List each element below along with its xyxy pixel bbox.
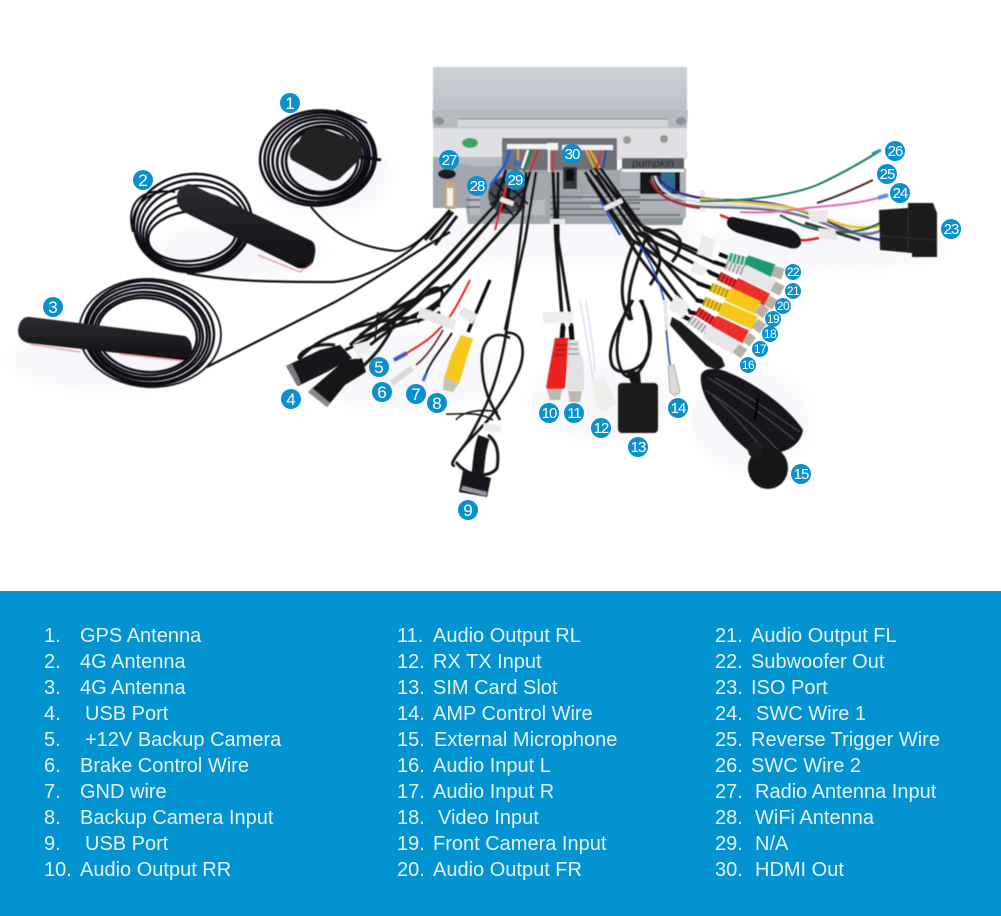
legend column 2: Front Camera Input bbox=[433, 833, 606, 855]
icon: RX TX input plug bbox=[580, 300, 617, 412]
legend column 1: 5. bbox=[44, 729, 61, 751]
legend column 1 bbox=[44, 625, 282, 881]
legend column 1: 6. bbox=[44, 755, 61, 777]
icon: 3.5mm microphone plug bbox=[670, 317, 725, 370]
badge 13: 13 bbox=[631, 439, 646, 456]
legend column 3: Radio Antenna Input bbox=[755, 781, 936, 803]
badge 17 bbox=[752, 341, 768, 357]
legend column 2: 20. bbox=[397, 859, 425, 881]
badge 24: 24 bbox=[893, 185, 908, 202]
legend column 2: Video Input bbox=[438, 807, 539, 829]
icon: black inline module bbox=[727, 217, 801, 248]
badge 2: 2 bbox=[138, 171, 148, 190]
badge 21: 21 bbox=[787, 284, 800, 298]
RCA 20 red bbox=[709, 272, 775, 305]
legend column 1: 3. bbox=[44, 677, 61, 699]
legend column 1: 1. bbox=[44, 625, 61, 647]
USB port 9 bbox=[446, 172, 526, 497]
legend column 3: 23. bbox=[715, 677, 743, 699]
badge 13 bbox=[628, 437, 648, 457]
badge 29: 29 bbox=[508, 172, 523, 189]
badge 23 bbox=[941, 219, 961, 239]
legend column 2: 15. bbox=[397, 729, 425, 751]
legend column 3: 22. bbox=[715, 651, 743, 673]
legend column 1: 9. bbox=[44, 833, 61, 855]
badge 15: 15 bbox=[794, 466, 809, 483]
legend column 2: 19. bbox=[397, 833, 425, 855]
icon: 4G antenna bottom bbox=[18, 232, 450, 391]
legend column 1: GPS Antenna bbox=[80, 625, 201, 647]
legend column 3: SWC Wire 2 bbox=[751, 755, 861, 777]
badge 26 bbox=[885, 141, 905, 161]
legend column 3: Audio Output FL bbox=[751, 625, 897, 647]
legend column 2: 13. bbox=[397, 677, 425, 699]
badge 21 bbox=[785, 283, 801, 299]
label: brand plate bbox=[622, 158, 684, 170]
badge 1: 1 bbox=[285, 94, 295, 113]
icon: external microphone bbox=[701, 369, 803, 489]
legend column 3: HDMI Out bbox=[755, 859, 844, 881]
backup and power wires 5 to 8 bbox=[392, 280, 490, 383]
legend column 1: 10. bbox=[44, 859, 72, 881]
legend column 2: Audio Input L bbox=[433, 755, 551, 777]
badge 11: 11 bbox=[567, 405, 581, 422]
legend column 2: External Microphone bbox=[434, 729, 617, 751]
legend column 2: Audio Output RL bbox=[433, 625, 581, 647]
label: brand plate: pumpkin bbox=[631, 158, 674, 170]
legend column 3: 27. bbox=[715, 781, 743, 803]
legend column 2: 11. bbox=[397, 625, 423, 647]
legend column 2: RX TX Input bbox=[433, 651, 542, 673]
badge 27 bbox=[439, 150, 459, 170]
badge 10 bbox=[539, 403, 559, 423]
badge 25 bbox=[877, 164, 897, 184]
RCA 19 yellow bbox=[697, 283, 766, 314]
badge 6: 6 bbox=[377, 383, 387, 402]
badge 11 bbox=[564, 403, 584, 423]
icon: 4G antenna top bbox=[129, 168, 450, 282]
badge 19: 19 bbox=[767, 312, 780, 326]
badge 16: 16 bbox=[742, 358, 755, 372]
legend column 2: 14. bbox=[397, 703, 425, 725]
badge 2 bbox=[133, 170, 153, 190]
legend column 1: Audio Output RR bbox=[80, 859, 231, 881]
legend column 3: N/A bbox=[755, 833, 788, 855]
badge 29 bbox=[505, 170, 525, 190]
legend column 3: Reverse Trigger Wire bbox=[751, 729, 940, 751]
legend column 2 bbox=[397, 625, 617, 881]
legend column 1: 4G Antenna bbox=[80, 677, 186, 699]
main cable bundles bbox=[350, 165, 715, 345]
badge 25: 25 bbox=[880, 166, 895, 183]
badge 3 bbox=[43, 297, 63, 317]
badge 8 bbox=[427, 393, 447, 413]
badge 24 bbox=[890, 183, 910, 203]
badge 15 bbox=[791, 464, 811, 484]
badge 17: 17 bbox=[754, 342, 767, 356]
RCA 18 yellow bbox=[696, 300, 763, 329]
legend column 3: 25. bbox=[715, 729, 743, 751]
badge 30 bbox=[562, 144, 582, 164]
badge 12: 12 bbox=[594, 420, 609, 437]
USB port group 4 bbox=[286, 285, 450, 407]
RCA 22 green bbox=[719, 254, 783, 274]
ties bbox=[499, 190, 705, 224]
icon: head unit rear bbox=[432, 67, 690, 225]
legend column 2: 18. bbox=[397, 807, 425, 829]
badge 9 bbox=[458, 500, 478, 520]
badge 12 bbox=[591, 418, 611, 438]
legend column 1: GND wire bbox=[80, 781, 167, 803]
RCA 16 white bbox=[682, 316, 744, 354]
RCA 10 red bbox=[546, 326, 569, 400]
badge 28: 28 bbox=[470, 178, 485, 195]
badge 30: 30 bbox=[565, 146, 580, 163]
legend column 1: Backup Camera Input bbox=[80, 807, 273, 829]
RCA 8 yellow bbox=[443, 335, 473, 392]
legend column 2: SIM Card Slot bbox=[433, 677, 557, 699]
icon: ISO connector bbox=[879, 203, 937, 257]
legend column 2: AMP Control Wire bbox=[433, 703, 593, 725]
badge 4 bbox=[281, 389, 301, 409]
badge 4: 4 bbox=[286, 390, 296, 409]
legend column 1: Brake Control Wire bbox=[80, 755, 249, 777]
badge 7 bbox=[406, 384, 426, 404]
legend column 2: 17. bbox=[397, 781, 425, 803]
badge 7: 7 bbox=[411, 385, 421, 404]
legend column 2: Audio Input R bbox=[433, 781, 554, 803]
badge 20: 20 bbox=[777, 299, 790, 313]
RCA connectors 16 to 22 bbox=[668, 235, 783, 354]
legend column 1: 7. bbox=[44, 781, 61, 803]
badge 23: 23 bbox=[944, 221, 959, 238]
badge 14: 14 bbox=[671, 400, 686, 417]
legend column 3: ISO Port bbox=[751, 677, 828, 699]
wiring photo illustration bbox=[17, 66, 961, 520]
icon: SIM card slot bbox=[610, 300, 658, 433]
legend column 1: 4. bbox=[44, 703, 61, 725]
badge 16 bbox=[740, 357, 756, 373]
badge 22 bbox=[785, 264, 801, 280]
GPS puck bbox=[290, 127, 362, 181]
legend column 3: WiFi Antenna bbox=[755, 807, 874, 829]
badge 18 bbox=[762, 326, 778, 342]
badge 14 bbox=[668, 398, 688, 418]
legend column 3: SWC Wire 1 bbox=[756, 703, 866, 725]
panel: legend bbox=[0, 591, 1001, 916]
badge 27: 27 bbox=[442, 152, 457, 169]
legend column 3: 28. bbox=[715, 807, 743, 829]
badge 3: 3 bbox=[48, 298, 58, 317]
badge 5: 5 bbox=[374, 358, 384, 377]
connector wires at head unit bbox=[490, 149, 620, 235]
antenna bar bbox=[177, 184, 315, 268]
legend column 1: 4G Antenna bbox=[80, 651, 186, 673]
antenna bar bbox=[18, 317, 192, 360]
badge 9: 9 bbox=[463, 501, 473, 520]
wire harness to ISO connector bbox=[650, 150, 888, 240]
badge 6 bbox=[372, 382, 392, 402]
legend column 1: 8. bbox=[44, 807, 61, 829]
legend column 2: 16. bbox=[397, 755, 425, 777]
legend column 1: USB Port bbox=[85, 703, 168, 725]
icon: GPS antenna bbox=[256, 106, 450, 251]
badge 5 bbox=[369, 357, 389, 377]
icon: AMP control wire bbox=[640, 245, 680, 396]
RCA 11 white bbox=[543, 312, 584, 402]
badge 20 bbox=[775, 298, 791, 314]
RCA 17 red bbox=[689, 311, 753, 342]
legend column 3: 24. bbox=[715, 703, 743, 725]
number badges bbox=[43, 93, 961, 520]
legend column 3: Subwoofer Out bbox=[751, 651, 884, 673]
legend column 3 bbox=[715, 625, 940, 881]
legend column 3: 26. bbox=[715, 755, 743, 777]
badge 19 bbox=[765, 311, 781, 327]
legend column 1: 2. bbox=[44, 651, 61, 673]
white label tags harness bbox=[808, 210, 838, 240]
legend column 2: 12. bbox=[397, 651, 425, 673]
badge 10: 10 bbox=[542, 405, 557, 422]
badge 1 bbox=[280, 93, 300, 113]
legend column 2: Audio Output FR bbox=[433, 859, 582, 881]
legend column 3: 30. bbox=[715, 859, 743, 881]
legend column 3: 21. bbox=[715, 625, 743, 647]
badge 8: 8 bbox=[432, 394, 442, 413]
badge 22: 22 bbox=[787, 265, 800, 279]
RCA 21 white bbox=[714, 262, 782, 291]
badge 26: 26 bbox=[888, 143, 903, 160]
legend column 1: +12V Backup Camera bbox=[85, 729, 281, 751]
badge 28 bbox=[467, 176, 487, 196]
badge 18: 18 bbox=[764, 327, 777, 341]
legend column 3: 29. bbox=[715, 833, 743, 855]
legend column 1: USB Port bbox=[85, 833, 168, 855]
